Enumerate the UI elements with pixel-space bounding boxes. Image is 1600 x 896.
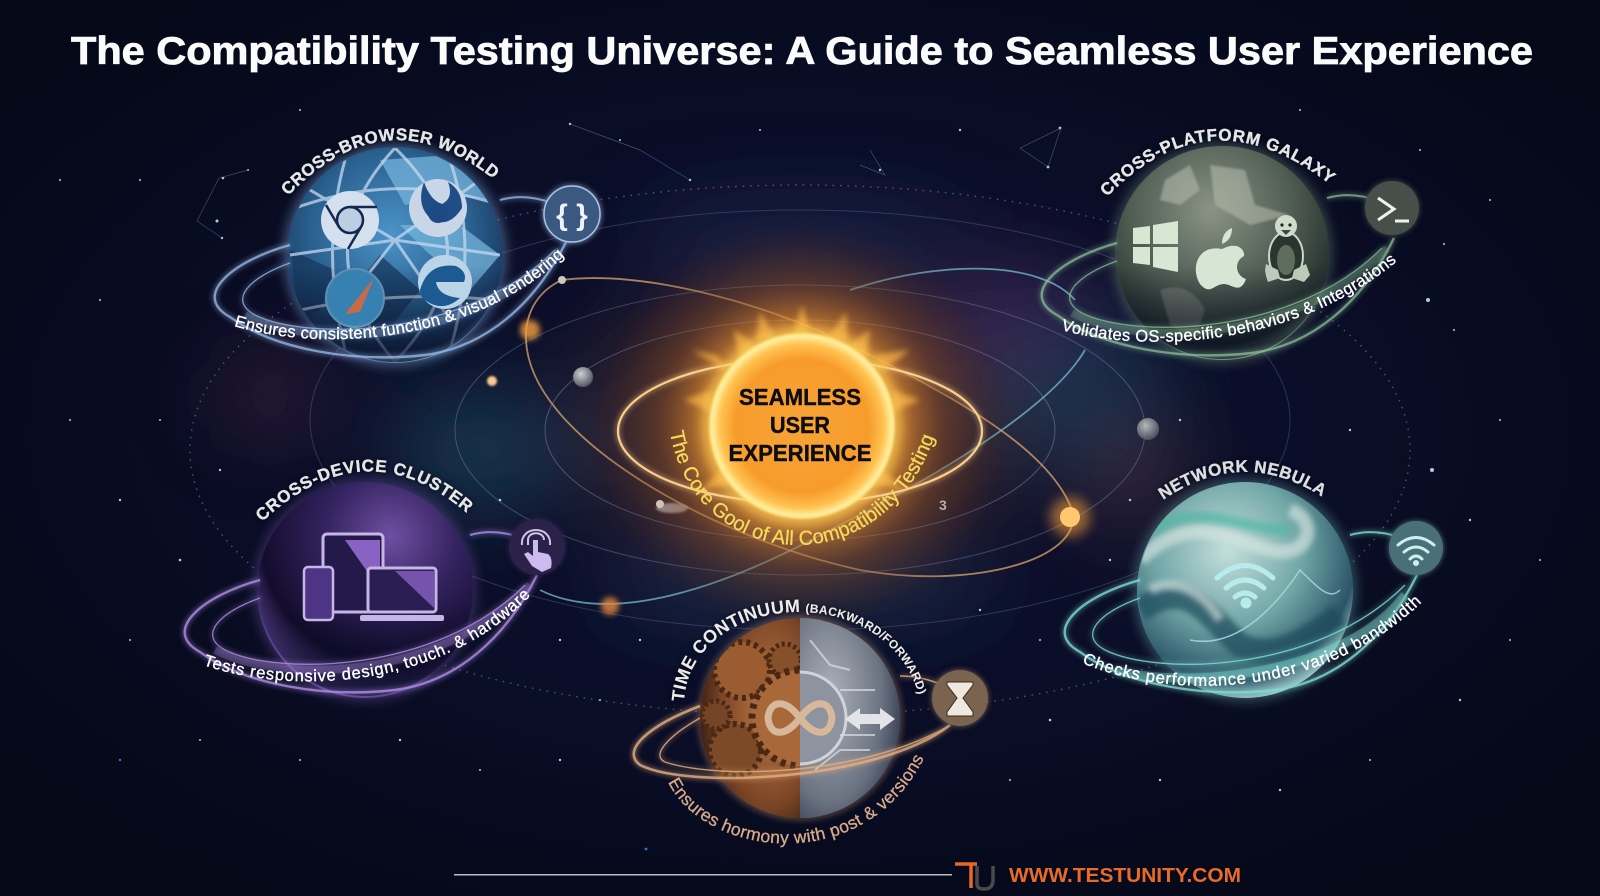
sun rays [684, 305, 920, 490]
planet name: CROSS-BROWSER WORLD [282, 128, 499, 194]
caption: Ensures consistent function & visual rendering [235, 250, 565, 340]
icon: edge [418, 255, 472, 309]
planet sphere [1110, 143, 1340, 365]
icon: wifi [1217, 566, 1273, 606]
gears [702, 618, 900, 818]
starfield [59, 109, 1541, 850]
icon: linux penguin [1265, 215, 1310, 282]
caption: Tests responsive design, touch. & hardware [206, 590, 530, 684]
panel: cross-browser world [210, 128, 605, 373]
moon: terminal prompt [1365, 181, 1419, 235]
sun label: SEAMLESS [739, 384, 861, 410]
panel: cross-device cluster [180, 458, 567, 707]
icon: windows [1133, 221, 1178, 272]
caption: Checks performance under varied bandwidth [1084, 597, 1422, 686]
icon: infinity [768, 704, 832, 732]
caption: Volidates OS-specific behaviors & Integrations [1064, 256, 1396, 345]
sun label: EXPERIENCE [728, 440, 872, 466]
bodies on the orbits: 3 [939, 497, 947, 513]
orbit ring [185, 532, 537, 692]
orbit ring [1065, 532, 1417, 692]
planet sphere [697, 615, 903, 821]
planet sphere [280, 144, 510, 366]
panel: sun core [607, 236, 1004, 616]
logo [955, 864, 993, 889]
orbit lines around the sun [190, 185, 1410, 715]
planet sphere [250, 479, 480, 701]
icon: safari [326, 269, 384, 327]
sun label [728, 384, 872, 466]
moon: wifi [1389, 521, 1443, 575]
planet name: CROSS-PLATFORM GALAXY [1100, 128, 1337, 196]
planet name: CROSS-DEVICE CLUSTER [256, 458, 474, 520]
icon: apple [1196, 228, 1246, 289]
orbit ring [634, 676, 950, 778]
bodies on the orbits [487, 276, 1159, 615]
constellation lines [197, 124, 1061, 238]
circuit half [800, 640, 875, 770]
panel: time continuum [628, 598, 992, 848]
caption: Ensures hormony with post & versions [668, 755, 923, 848]
moon: code braces: { } [556, 199, 588, 232]
panel: cross-platform galaxy [1037, 128, 1422, 368]
title: The Compatibility Testing Universe: A Guide to Seamless User Experience [71, 30, 1533, 73]
orbit ring [1042, 195, 1394, 355]
icon: firefox [409, 179, 467, 237]
icon: double arrow [845, 708, 895, 730]
icon: chrome [321, 191, 379, 249]
sun label: USER [770, 412, 830, 438]
sun disc [704, 328, 900, 524]
planet sphere [1134, 479, 1356, 701]
moon: touch gesture [509, 519, 565, 575]
moon: code braces [544, 186, 600, 242]
orange orbit ring [618, 359, 982, 503]
footer [454, 864, 1241, 889]
planet name: NETWORK NEBULA [1157, 460, 1325, 500]
sun caption: The Core Gool of All Compatibility Testing [670, 430, 937, 545]
icon: devices [304, 534, 444, 621]
planet name: TIME CONTINUUM (BACKWARD/FORWARD) [671, 598, 926, 700]
orbit ring [215, 197, 567, 357]
moon: hourglass [932, 670, 988, 726]
website: WWW.TESTUNITY.COM [1009, 865, 1241, 887]
panel: network nebula [1060, 460, 1446, 708]
